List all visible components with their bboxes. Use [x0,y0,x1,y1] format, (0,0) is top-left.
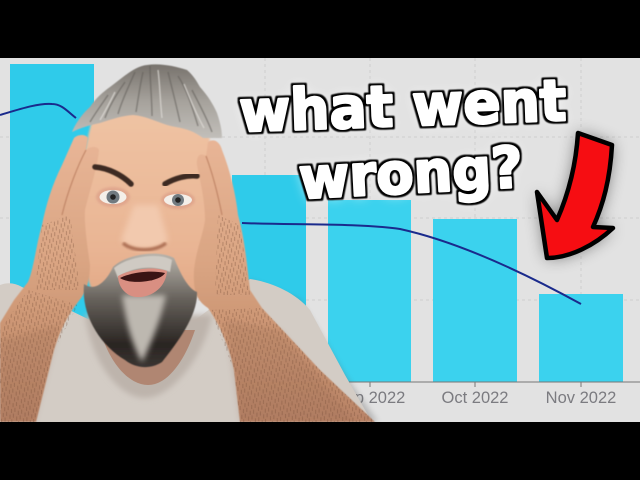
axis labels: Sep 2022 [335,389,405,407]
trend line [0,104,581,304]
finger creases [62,150,222,215]
neck [100,330,195,385]
right eye [161,191,195,209]
person shadow [240,280,378,422]
bottom letterbox [0,422,640,480]
left arm and hand [0,135,99,422]
face [78,112,212,338]
bar chart [0,58,640,387]
left eye [96,187,130,207]
hair [72,64,222,138]
axis labels [335,389,616,407]
mouth [118,269,167,297]
arrow shadow [537,133,613,258]
top letterbox [0,0,640,58]
shirt neck shadow [85,315,212,398]
hair strands [90,66,212,132]
eyebrows [95,167,131,184]
shirt [0,279,372,422]
chart background [0,58,640,422]
person [0,64,378,422]
title: what went wrong?: what went [238,68,567,145]
nose [121,205,168,249]
arm hair [0,215,375,422]
axis labels: Oct 2022 [442,389,508,407]
right arm and hand [194,140,375,422]
title: what went wrong? [238,68,567,212]
axis labels: Nov 2022 [546,389,616,407]
title: what went wrong?: wrong? [297,135,524,212]
beard [84,254,197,367]
beard grey center [122,295,166,362]
red arrow [537,133,613,258]
mustache [114,256,172,278]
